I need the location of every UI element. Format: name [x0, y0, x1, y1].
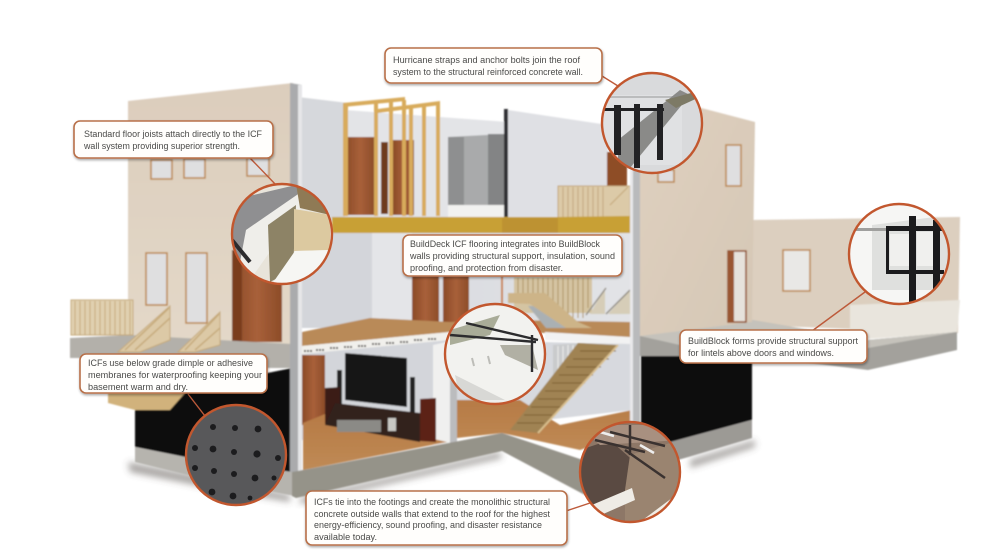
upstairs grey recess: [448, 109, 508, 219]
callout: BuildDeck flooring: [403, 235, 622, 276]
right wall windows: [658, 145, 741, 186]
annex wing: [640, 217, 960, 370]
right wall door: [728, 251, 746, 322]
callout: floor joists: [74, 121, 273, 158]
callout: waterproofing: membranes for waterproofing keeping your: [88, 370, 263, 381]
callout: lintels: [680, 330, 867, 363]
joist strip: [302, 332, 450, 354]
callout: waterproofing: ICFs use below grade dimple or adhesive: [88, 358, 253, 369]
callout: footings: concrete outside walls that extend to the roof for the highest: [314, 509, 550, 520]
second floor deck band: [332, 216, 630, 234]
foundation front slab: [292, 433, 641, 498]
callout: lintels: for lintels above doors and windows.: [688, 348, 834, 359]
ground floor wood: [303, 414, 447, 470]
detail circle: deck integration: [445, 304, 545, 404]
callout: hurricane straps: system to the structural reinforced concrete wall.: [393, 67, 583, 78]
callout: waterproofing: [80, 354, 267, 393]
right main wall: [640, 92, 755, 336]
right basement membrane: [641, 356, 752, 450]
detail circle: footings: [580, 422, 680, 522]
right upper beam: [545, 332, 630, 345]
ground floor walls: [302, 340, 450, 442]
upstairs doors: [345, 137, 627, 218]
left foundation: [135, 447, 300, 497]
ground floor door: [302, 355, 325, 425]
structural posts: [290, 83, 640, 473]
callout: floor joists: Standard floor joists attach directly to the ICF: [84, 129, 262, 140]
callout: hurricane straps: Hurricane straps and anchor bolts join the roof: [393, 55, 580, 66]
left wall windows: [146, 158, 269, 323]
upper deck railing: [558, 186, 630, 218]
callout: footings: ICFs tie into the footings and create the monolithic structural: [314, 497, 550, 508]
interior lower upper-storey walls: [300, 233, 632, 328]
left wall door: [232, 250, 282, 342]
callout: waterproofing: basement warm and dry.: [88, 382, 188, 393]
callout: footings: [306, 491, 567, 545]
callout: floor joists: wall system providing superior strength.: [83, 141, 240, 152]
detail circle: dimple membrane: [186, 405, 286, 505]
house cutaway illustration: [70, 83, 960, 504]
interior upper walls: [298, 97, 348, 222]
detail circle: hurricane straps: [602, 73, 702, 173]
lower staircase: [510, 343, 618, 433]
left slab and porch: [70, 335, 292, 368]
callout: BuildDeck flooring: walls providing structural support, insulation, sound: [409, 251, 615, 262]
callout: hurricane straps: [385, 48, 602, 83]
detail circle: lintel forms: [849, 204, 950, 306]
callout: footings: energy-efficiency, sound proofing, and disaster resistance: [314, 520, 542, 531]
porch stairs underside: [108, 393, 185, 410]
left main wall: [128, 83, 293, 345]
porch railing: [71, 300, 220, 352]
stud framing: [343, 97, 440, 216]
detail circle: floor joists: [232, 184, 332, 284]
middle floor wood: [302, 318, 630, 346]
upper stairs: [508, 277, 630, 328]
right foundation slab: [641, 420, 752, 470]
leader lines: [188, 76, 865, 511]
callout: footings: available today.: [314, 532, 377, 543]
middle storey doors: [412, 276, 503, 322]
callout: lintels: BuildBlock forms provide structural support: [688, 336, 858, 347]
left basement membrane: [135, 368, 292, 472]
ground shadow: [128, 440, 755, 504]
callout: BuildDeck flooring: proofing, and protection from disaster.: [410, 263, 563, 274]
television and media console: [325, 353, 436, 442]
callout: BuildDeck flooring: BuildDeck ICF flooring integrates into BuildBlock: [410, 239, 600, 250]
